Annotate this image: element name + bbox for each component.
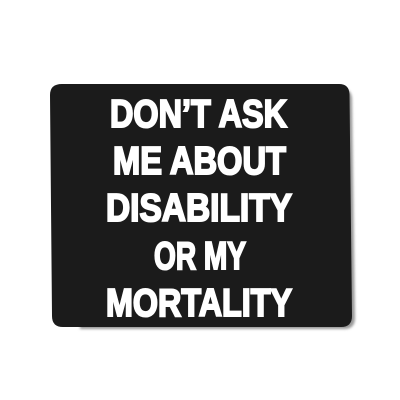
slogan text [106,93,292,325]
line 3: DISABILITY [106,187,292,230]
mat shadow [80,88,355,329]
line 4: OR MY [154,235,246,278]
line 5: MORTALITY [106,282,292,325]
line 2: ME ABOUT [113,140,286,183]
mat panel [50,84,352,327]
line 1: DON’T ASK [110,93,287,136]
